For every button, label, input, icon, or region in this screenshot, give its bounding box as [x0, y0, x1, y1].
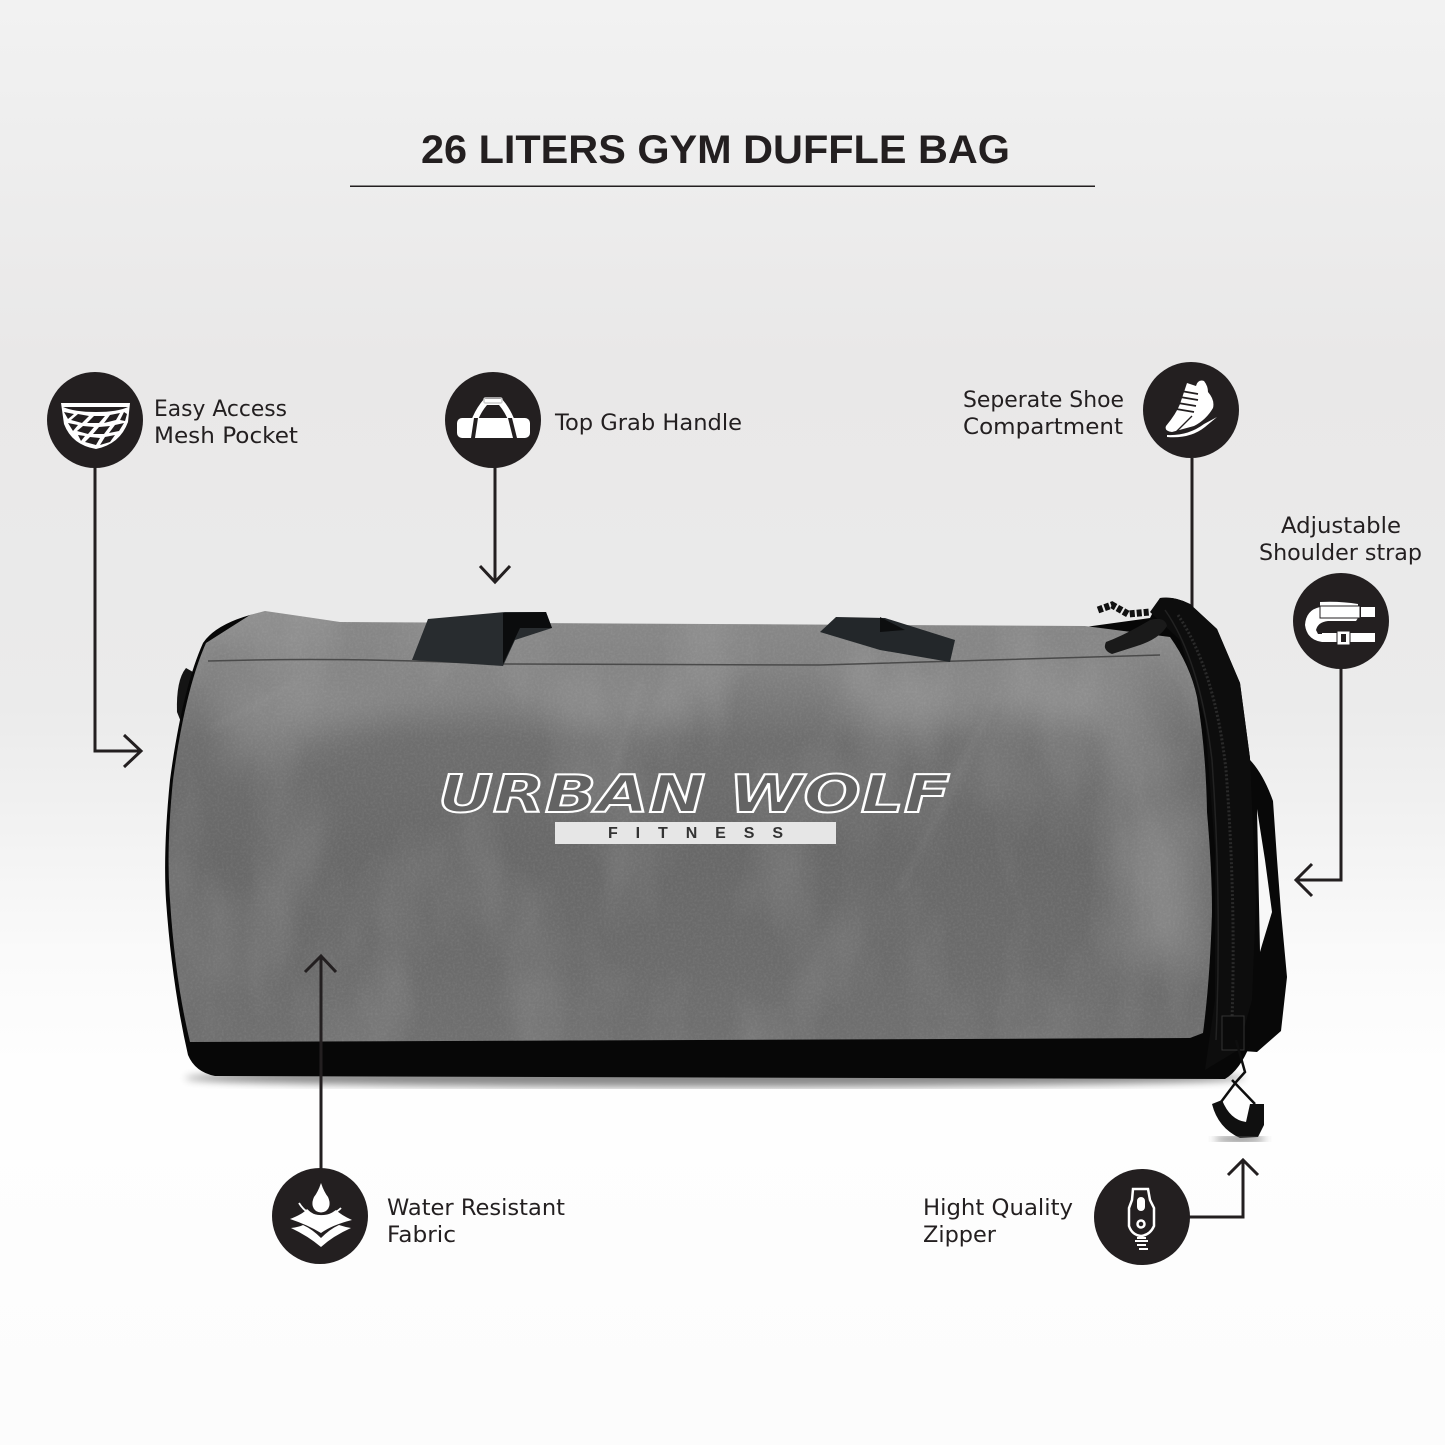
icon: water drop and layers [272, 1168, 368, 1264]
label: Fabric [387, 1223, 456, 1248]
duffle bag [160, 598, 1287, 1142]
label: Easy Access [154, 397, 287, 422]
icon: duffle bag [445, 372, 541, 468]
callout: shoe compartment [963, 362, 1239, 458]
label: Compartment [963, 415, 1123, 440]
label: Shoulder strap [1259, 541, 1422, 566]
label: Top Grab Handle [554, 411, 742, 436]
arrow to fabric [305, 956, 336, 1172]
label [1259, 514, 1422, 566]
left handle [412, 612, 552, 666]
label [963, 388, 1124, 440]
top seam [208, 655, 1160, 665]
arrow to zipper [1188, 1160, 1258, 1217]
bag logo: FITNESS [608, 825, 783, 842]
callout: top grab handle [445, 372, 742, 582]
black end rim and base [165, 598, 1250, 1079]
label: Mesh Pocket [154, 424, 298, 449]
bag logo: URBAN WOLF [438, 765, 950, 825]
callout: mesh pocket [47, 372, 298, 767]
fabric highlights [215, 670, 1205, 960]
callout line: shoe compartment [1190, 458, 1194, 625]
right handle [820, 617, 955, 662]
fabric mottling [169, 616, 1162, 1041]
bottom zipper pull [1212, 1016, 1266, 1142]
grey fabric body [160, 605, 1220, 1050]
bag floor shadow [185, 1069, 1245, 1087]
zipper track [1178, 615, 1233, 1020]
label [387, 1196, 565, 1248]
fabric weave texture [172, 642, 1210, 1042]
callout: water resistant [272, 956, 565, 1264]
label [923, 1196, 1073, 1248]
shoulder strap [1228, 755, 1287, 1052]
arrow to mesh pocket [95, 465, 141, 767]
icon: zipper [1094, 1169, 1190, 1265]
icon: running shoe [1143, 362, 1239, 458]
bag logo [438, 765, 950, 844]
label [154, 397, 298, 449]
label: Adjustable [1281, 514, 1401, 539]
callout: zipper [923, 1160, 1258, 1265]
callout: shoulder strap [1259, 514, 1422, 896]
arrow to strap [1296, 666, 1341, 896]
icon: belt [1293, 573, 1389, 669]
arrow to handle [480, 465, 510, 582]
label: Seperate Shoe [963, 388, 1124, 413]
left side strap bulge [177, 668, 193, 722]
label: Zipper [923, 1223, 997, 1248]
title: 26 LITERS GYM DUFFLE BAG [421, 128, 1010, 172]
top zipper pull [1098, 605, 1167, 654]
label: Water Resistant [387, 1196, 565, 1221]
label: Hight Quality [923, 1196, 1073, 1221]
icon: mesh pocket [47, 372, 143, 468]
